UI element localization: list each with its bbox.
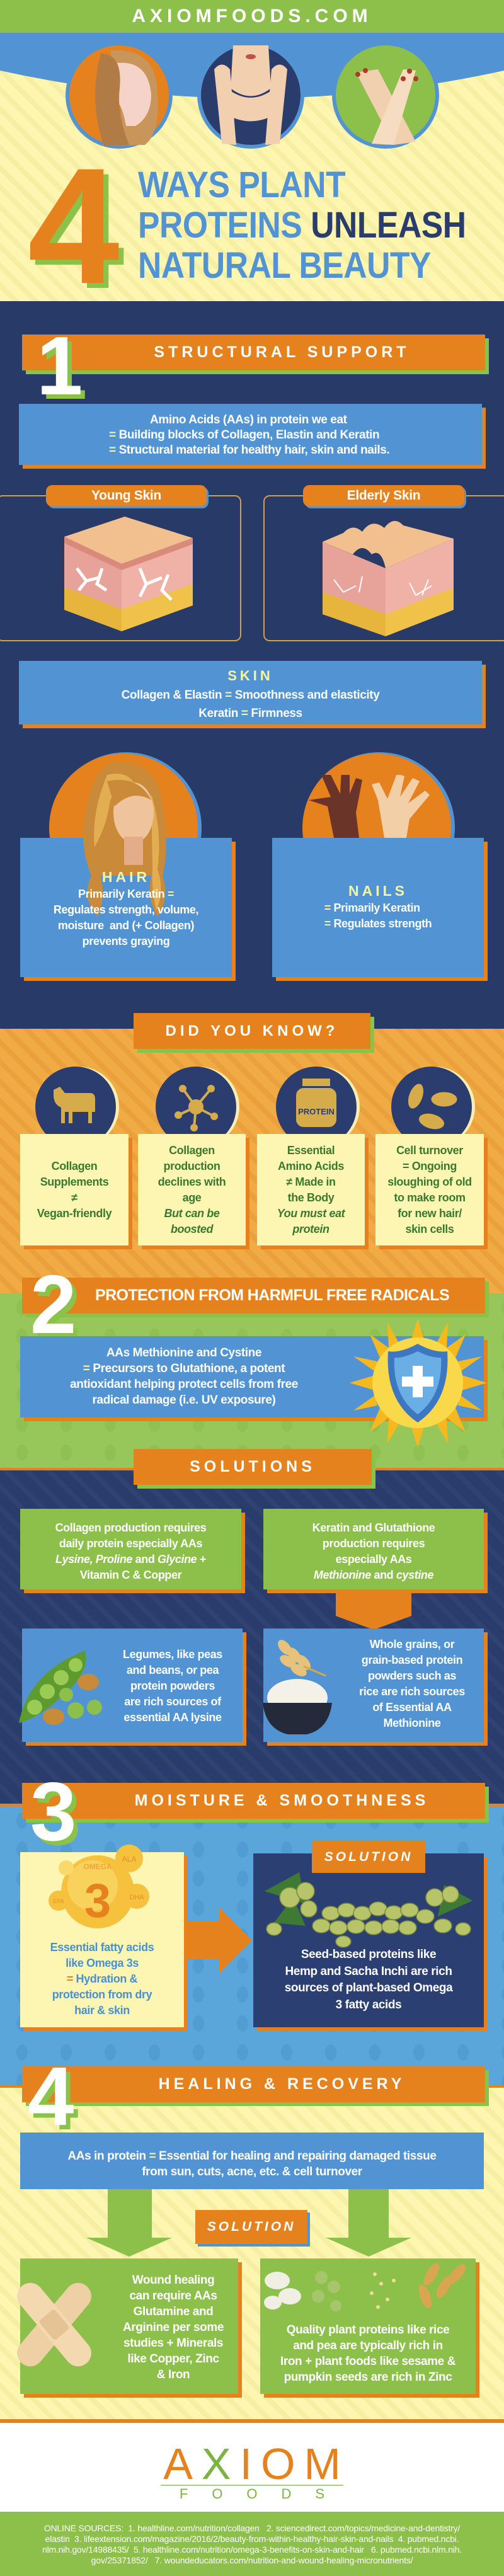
card: collagen production: But can be <box>164 1207 219 1220</box>
icon: bandage <box>17 2283 91 2366</box>
free radicals text box: antioxidant helping protect cells from free <box>70 1378 298 1391</box>
solution box: collagen production: daily protein especially AAs <box>59 1537 202 1550</box>
illustration: seeds <box>265 1872 472 1948</box>
illustration: two hands <box>309 775 430 838</box>
panel: elderly skin <box>263 495 504 641</box>
panel: legumes: and beans, or pea <box>127 1664 219 1676</box>
panel: wound healing: can require AAs <box>129 2289 217 2303</box>
solution box: keratin and glutathione: especially AAs <box>336 1553 411 1566</box>
card: essential amino acids: the Body <box>288 1191 334 1203</box>
solution box: keratin and glutathione: Methionine and cystine <box>314 1569 433 1581</box>
panel: plant proteins zinc iron: pumpkin seeds are rich in Zinc <box>284 2371 452 2384</box>
background: yellow striped hero <box>0 33 504 301</box>
free radicals text box: = Precursors to Glutathione, a potent <box>83 1362 285 1375</box>
footer sources: gov/25371852/ 7. woundeducators.com/nutrition-and-wound-healing-micronutrients/ <box>91 2555 413 2565</box>
panel: young skin <box>0 495 241 641</box>
footer sources <box>0 2512 504 2576</box>
panel: nails: = Regulates strength <box>324 917 432 930</box>
label: elderly skin: Elderly Skin <box>347 488 420 503</box>
icon: protein jar: PROTEIN <box>298 1107 335 1116</box>
section 2 header: PROTECTION FROM HARMFUL FREE RADICALS <box>95 1286 449 1304</box>
section 4 number: 4 <box>28 2050 74 2143</box>
card: collagen supplements: Vegan-friendly <box>37 1207 112 1220</box>
illustration: omega 3 capsule: ALA <box>122 1855 136 1863</box>
panel: omega 3: Essential fatty acids <box>50 1941 154 1954</box>
panel: omega 3: like Omega 3s <box>66 1957 139 1969</box>
solutions header: SOLUTIONS <box>190 1458 316 1475</box>
card: essential amino acids: Amino Acids <box>278 1159 344 1172</box>
icon: hair circle <box>49 752 202 838</box>
panel: seed solution: Seed-based proteins like <box>301 1948 436 1961</box>
footer sources: nlm.nih.gov/14988435/ 5. healthline.com/nutrition/omega-3-benefits-on-skin-and-hair 6. pubmed.ncbi.nlm.nih. <box>42 2545 462 2555</box>
icon: molecule <box>156 1067 239 1147</box>
panel: grains: powders such as <box>368 1669 456 1682</box>
card: essential amino acids <box>257 1134 365 1245</box>
young skin cube <box>64 517 193 631</box>
site name: AXIOMFOODS.COM <box>132 6 372 26</box>
illustration: peas and beans <box>19 1651 102 1725</box>
footer sources: ONLINE SOURCES: 1. healthline.com/nutrition/collagen 2. sciencedirect.com/topics/medicine-and-dentistry/ <box>44 2523 460 2533</box>
card: collagen production: age <box>183 1191 201 1203</box>
solution box: collagen production: Collagen production requires <box>55 1521 206 1534</box>
section 3 header <box>22 1783 485 1819</box>
card: collagen supplements: Supplements <box>40 1176 108 1188</box>
healing text box <box>20 2132 484 2189</box>
icon: cells <box>391 1067 475 1147</box>
healing text box: from sun, cuts, acne, etc. & cell turnover <box>142 2165 362 2178</box>
solutions header <box>134 1449 372 1485</box>
card: cell turnover <box>375 1134 484 1245</box>
icon: woman profile <box>66 42 173 149</box>
amino acids text box: = Building blocks of Collagen, Elastin and Keratin <box>109 428 379 442</box>
panel: wound healing: Arginine per some <box>123 2321 224 2334</box>
arrow: down to grains <box>336 1593 411 1629</box>
label: solution (section 3) <box>312 1841 425 1873</box>
panel: nails <box>272 838 484 977</box>
panel: grains: Methionine <box>383 1717 441 1729</box>
icon: protein jar <box>276 1067 360 1147</box>
logo: axiom foods: AXIOM <box>163 2439 350 2488</box>
background: navy solutions <box>0 1468 504 1804</box>
card: cell turnover: to make room <box>394 1191 466 1203</box>
label: young skin <box>46 485 207 507</box>
card: collagen production <box>138 1134 246 1245</box>
card: collagen production: Collagen <box>169 1144 215 1157</box>
icon: cow <box>35 1067 119 1147</box>
illustration: seeds and grains <box>264 2263 466 2311</box>
skin text box: SKIN <box>227 668 273 684</box>
healing text box: AAs in protein = Essential for healing and repairing damaged tissue <box>67 2150 437 2163</box>
section 2 header <box>22 1278 485 1314</box>
card: collagen production: boosted <box>171 1222 213 1235</box>
solution box: keratin and glutathione: Keratin and Glutathione <box>312 1521 435 1534</box>
panel: grains: rice are rich sources <box>359 1685 465 1698</box>
hair text: Primarily Keratin = <box>78 888 174 900</box>
solution box: collagen production <box>20 1509 241 1589</box>
did you know header <box>134 1013 370 1049</box>
background: top green bar <box>0 0 504 33</box>
icon: sun shield <box>350 1319 486 1448</box>
background: light blue section 3 <box>0 1804 504 2085</box>
background: orange did you know <box>0 1029 504 1293</box>
title text <box>138 164 466 286</box>
card: essential amino acids: ≠ Made in <box>286 1176 336 1188</box>
panel: omega 3 <box>20 1852 184 2027</box>
card: cell turnover: = Ongoing <box>403 1159 457 1172</box>
hero circles illustrations <box>66 45 439 149</box>
footer sources: elastin 3. lifeextension.com/magazine/2016/2/beauty-from-within-healthy-hair-skin-and-nails 4. pubmed.ncbi. <box>45 2534 459 2544</box>
illustration: omega 3 capsule: OMEGA <box>83 1862 112 1871</box>
panel: nails: = Primarily Keratin <box>324 902 420 914</box>
icon: nails circle <box>302 752 455 838</box>
section 1 header <box>22 335 485 370</box>
background: yellow section 4 <box>0 2085 504 2421</box>
background: blue curved band <box>0 33 504 97</box>
card: cell turnover: Cell turnover <box>396 1144 463 1157</box>
panel: seed solution: sources of plant-based Omega <box>285 1981 452 1995</box>
amino acids text box: Amino Acids (AAs) in protein we eat <box>150 413 347 426</box>
panel: seed solution <box>253 1853 484 2027</box>
title text: PROTEINS UNLEASH <box>138 205 466 246</box>
panel: plant proteins zinc iron <box>260 2258 476 2394</box>
panel: grains: of Essential AA <box>372 1701 452 1714</box>
skin text box: Collagen & Elastin = Smoothness and elasticity <box>122 689 379 702</box>
solution box: keratin and glutathione <box>263 1509 484 1589</box>
panel: legumes: Legumes, like peas <box>123 1648 222 1661</box>
illustration: woman with long hair <box>83 762 166 917</box>
section 1 header: STRUCTURAL SUPPORT <box>154 343 410 361</box>
title text: WAYS PLANT <box>138 164 345 205</box>
panel: nails: NAILS <box>348 883 408 899</box>
label: elderly skin <box>303 485 464 507</box>
skin text box <box>19 661 482 724</box>
panel: grains: Whole grains, or <box>370 1638 454 1651</box>
section 3 number: 3 <box>30 1765 76 1858</box>
card: collagen supplements: ≠ <box>71 1191 77 1203</box>
label: solution (section 3): SOLUTION <box>324 1850 413 1864</box>
amino acids text box <box>19 404 482 465</box>
card: cell turnover: for new hair/ <box>398 1207 462 1220</box>
background: orange divider <box>0 2419 504 2423</box>
arrow: omega to seeds <box>188 1907 252 1974</box>
card: collagen production: declines with <box>158 1176 226 1188</box>
section 4 header <box>22 2066 485 2102</box>
panel: seed solution: Hemp and Sacha Inchi are rich <box>285 1964 452 1978</box>
label: young skin: Young Skin <box>91 488 161 503</box>
panel: hair box <box>20 838 232 977</box>
illustration: omega 3 capsule <box>49 1845 149 1928</box>
panel: wound healing: Glutamine and <box>134 2305 213 2318</box>
card: cell turnover: sloughing of old <box>387 1176 472 1188</box>
panel: wound healing: & Iron <box>157 2368 190 2381</box>
illustration: omega 3 capsule: EPA <box>53 1898 64 1904</box>
amino acids text box: = Structural material for healthy hair, skin and nails. <box>109 444 389 457</box>
hair text: moisture and (+ Collagen) <box>58 919 194 932</box>
title text: NATURAL BEAUTY <box>138 245 431 286</box>
card: essential amino acids: protein <box>292 1222 329 1235</box>
panel: seed solution: 3 fatty acids <box>336 1998 401 2011</box>
free radicals text box <box>20 1336 484 1417</box>
illustration: wheat and rice bowl <box>263 1640 332 1734</box>
skin text box: Keratin = Firmness <box>198 707 302 720</box>
panel: plant proteins zinc iron: Iron + plant foods like sesame & <box>280 2355 455 2368</box>
label: solution (section 4) <box>195 2210 307 2244</box>
hair text: prevents graying <box>83 935 169 947</box>
hair text: Regulates strength, volume, <box>54 903 198 916</box>
section 4 header: HEALING & RECOVERY <box>159 2075 405 2093</box>
illustration: omega 3 capsule: DHA <box>129 1894 144 1901</box>
card: essential amino acids: Essential <box>287 1144 335 1157</box>
icons: did you know circles <box>35 1067 475 1134</box>
panel: legumes <box>22 1629 243 1742</box>
panel: wound healing <box>20 2258 238 2394</box>
panel: plant proteins zinc iron: and pea are typically rich in <box>293 2339 443 2352</box>
panel: grains: grain-based protein <box>362 1654 462 1666</box>
card: cell turnover: skin cells <box>405 1222 454 1235</box>
panel: plant proteins zinc iron: Quality plant proteins like rice <box>287 2323 449 2337</box>
card: collagen supplements: Collagen <box>52 1159 97 1172</box>
panel: omega 3: protection from dry <box>52 1988 152 2001</box>
panel: legumes: essential AA lysine <box>123 1711 222 1724</box>
card: collagen production: production <box>164 1159 220 1172</box>
solution box: collagen production: Vitamin C & Copper <box>80 1569 181 1581</box>
card: collagen supplements <box>20 1134 129 1245</box>
background: navy section 1 <box>0 301 504 1029</box>
arrow: right green down <box>326 2189 411 2257</box>
arrow: left green down <box>86 2189 172 2257</box>
logo: axiom foods: FOODS <box>180 2486 348 2502</box>
panel: legumes: are rich sources of <box>124 1695 221 1708</box>
icon: woman neck <box>197 42 304 149</box>
panel: legumes: protein powders <box>130 1680 215 1692</box>
panel: wound healing: like Copper, Zinc <box>127 2352 219 2366</box>
panel: wound healing: studies + Minerals <box>123 2337 223 2350</box>
section 2 number: 2 <box>30 1258 76 1351</box>
illustration: omega 3 capsule: 3 <box>84 1874 111 1928</box>
panel: wound healing: Wound healing <box>132 2274 214 2287</box>
did you know header: DID YOU KNOW? <box>166 1022 338 1039</box>
section 1 number: 1 <box>37 319 83 412</box>
solution box: keratin and glutathione: production requires <box>323 1537 425 1550</box>
panel: omega 3: hair & skin <box>74 2004 130 2017</box>
background: green section 2 <box>0 1293 504 1468</box>
elderly skin cube <box>323 520 454 636</box>
section 3 header: MOISTURE & SMOOTHNESS <box>135 1792 429 1809</box>
free radicals text box: radical damage (i.e. UV exposure) <box>93 1394 275 1407</box>
panel: grains <box>263 1629 484 1742</box>
icon: hands with nails <box>332 42 439 149</box>
label: solution (section 4): SOLUTION <box>207 2219 295 2234</box>
title big number 4: 4 <box>28 134 120 318</box>
card: essential amino acids: You must eat <box>277 1207 345 1220</box>
solution box: collagen production: Lysine, Proline and Glycine + <box>55 1553 206 1566</box>
panel: omega 3: = Hydration & <box>67 1972 137 1985</box>
free radicals text box: AAs Methionine and Cystine <box>106 1346 261 1360</box>
hair text <box>54 869 198 947</box>
hair text: HAIR <box>102 869 150 885</box>
